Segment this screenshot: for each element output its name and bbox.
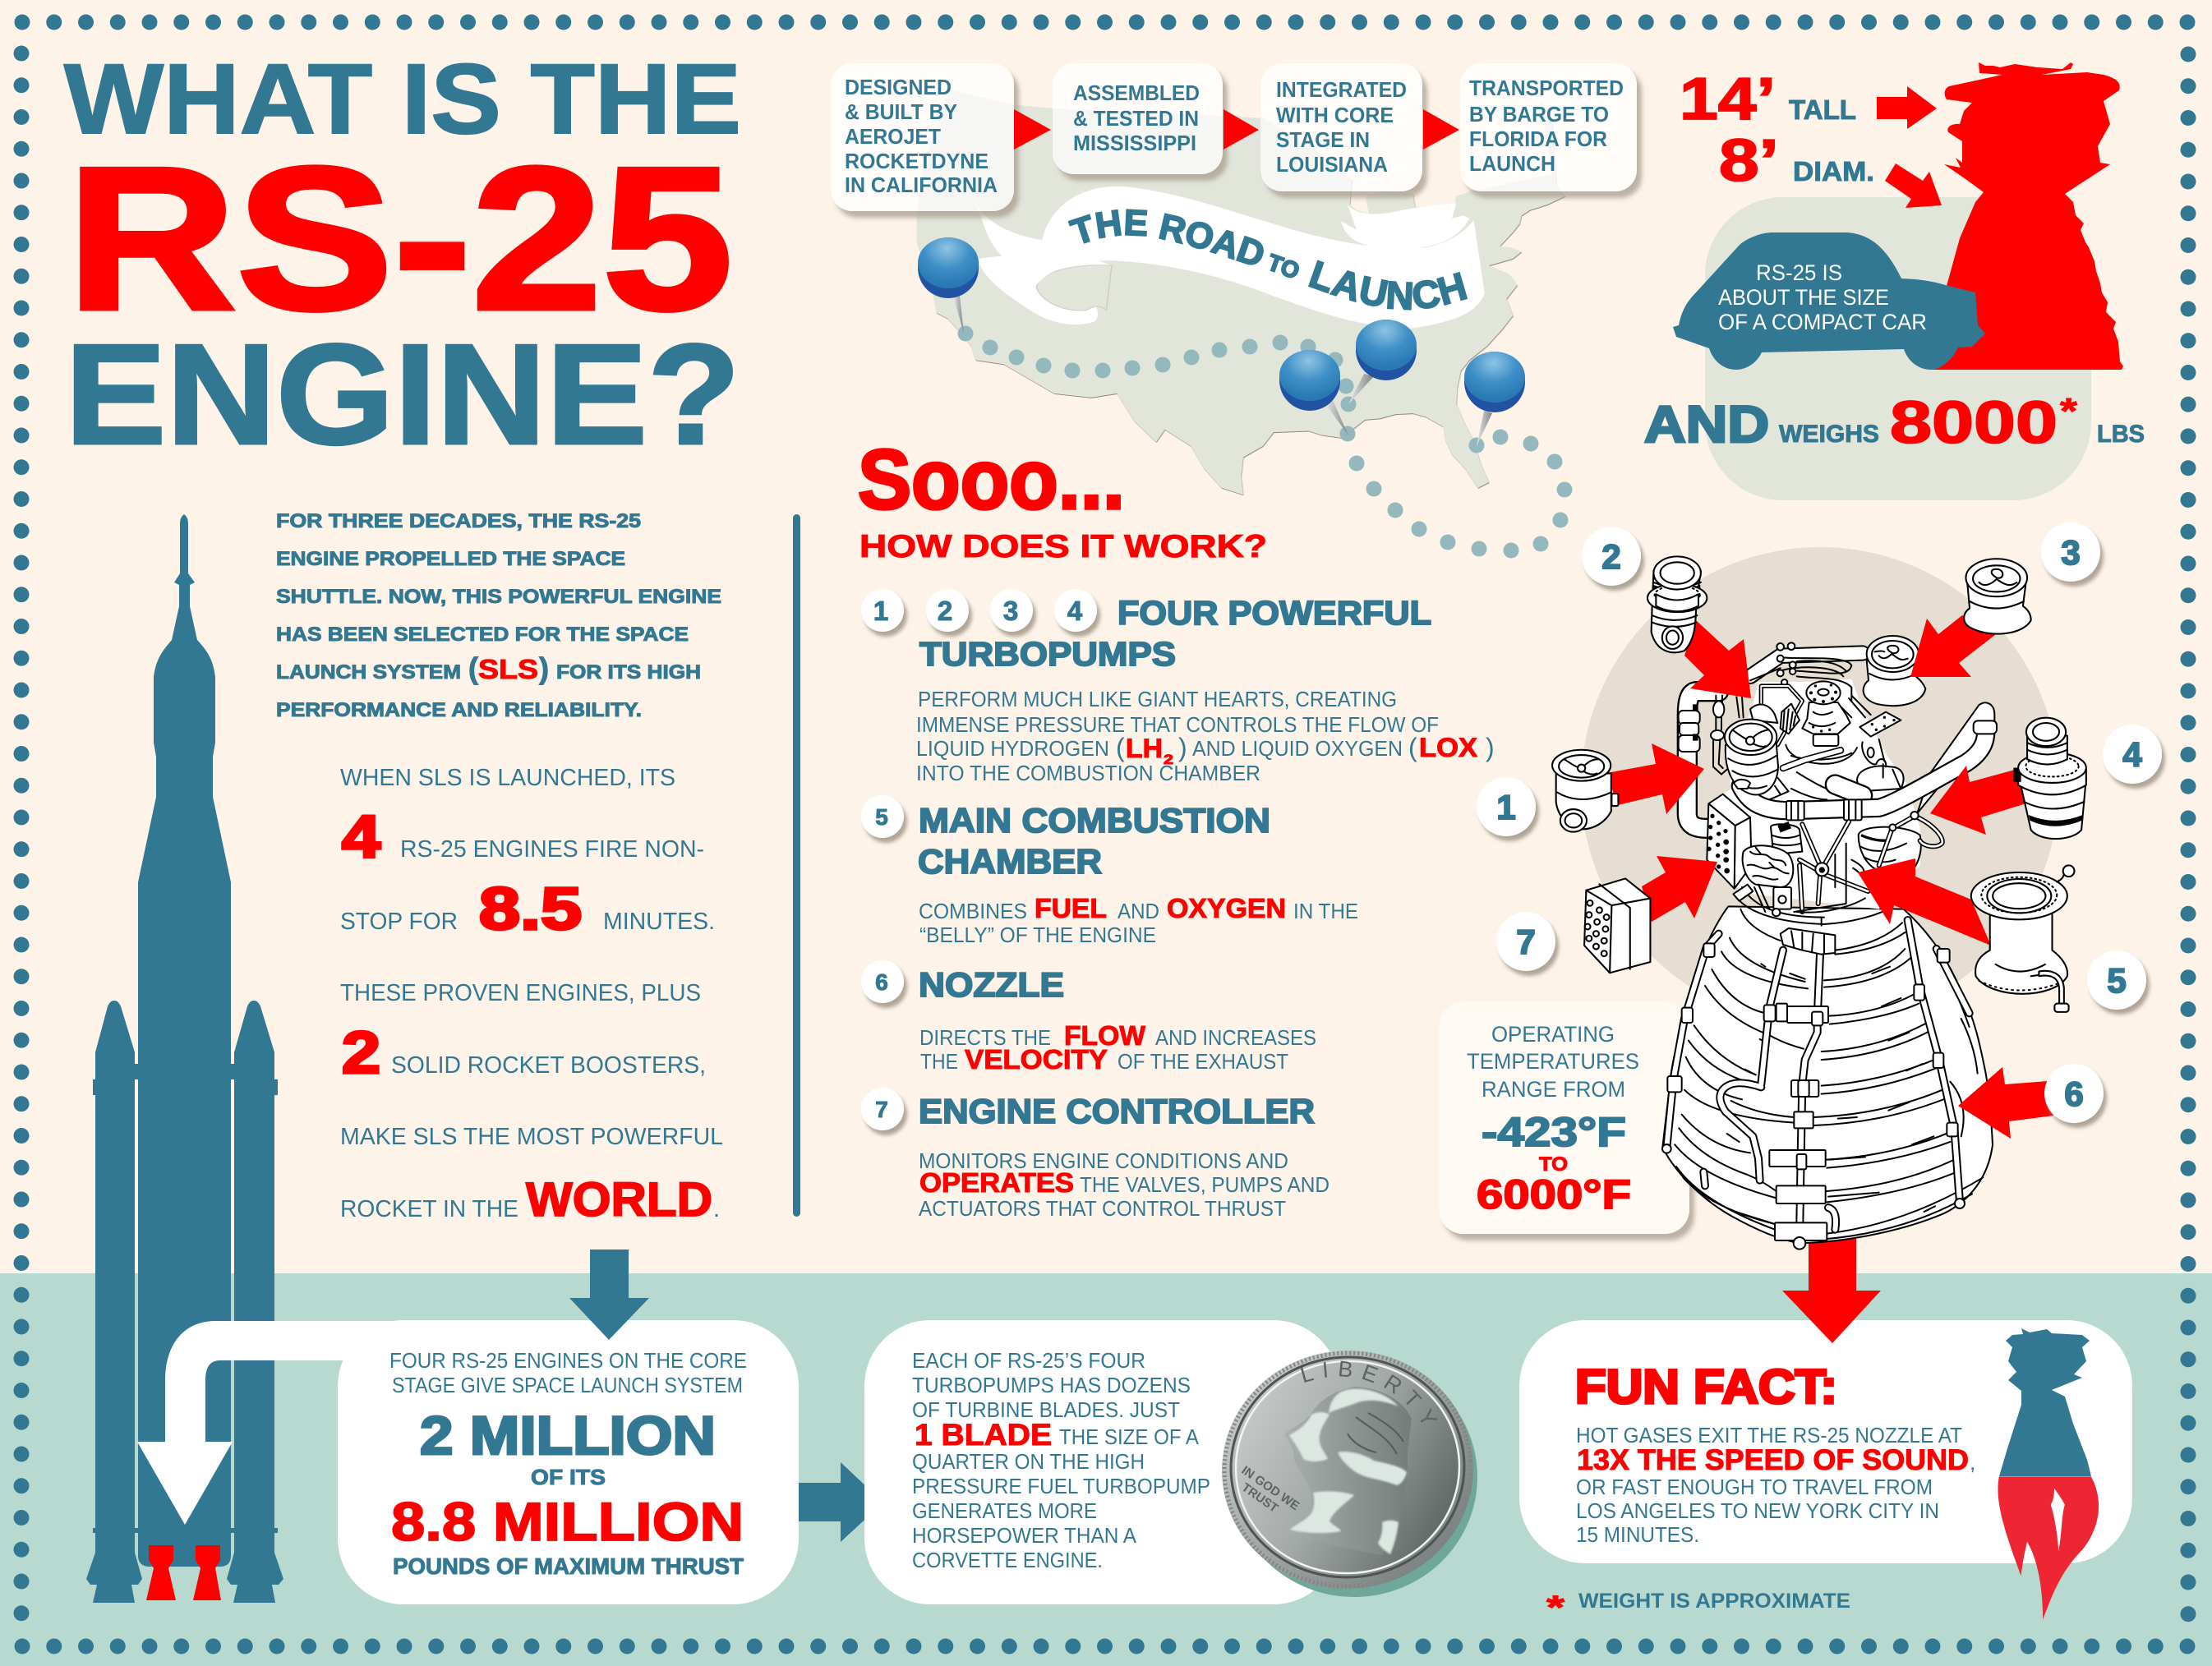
section: turbopumps: FOUR POWERFUL — [1118, 594, 1431, 632]
part number badges — [1477, 522, 2162, 1123]
operating temperatures callout — [1439, 1001, 1689, 1234]
ribbon top fold — [1341, 203, 1469, 249]
weight line: WEIGHS — [1779, 421, 1879, 448]
USA map shape — [917, 90, 1565, 495]
arrow step 1 — [1014, 109, 1051, 150]
ribbon loop opening — [1036, 265, 1112, 311]
section: nozzle: 6 — [875, 969, 888, 995]
title: WHAT IS THE — [64, 43, 741, 154]
red part arrows — [1606, 615, 2053, 1139]
section: engine controller: OPERATES — [919, 1167, 1074, 1198]
section: engine controller — [861, 1088, 1330, 1221]
panel: turbine blade: OF TURBINE BLADES. JUST — [912, 1397, 1180, 1422]
turbopump part 1 — [1552, 750, 1618, 832]
launch facts text block: STOP FOR — [340, 909, 458, 935]
panel: turbine blade: THE SIZE OF A — [1059, 1424, 1200, 1449]
launch facts text block: THESE PROVEN ENGINES, PLUS — [340, 980, 701, 1006]
title — [64, 43, 741, 474]
intro paragraph: SLS — [478, 654, 538, 684]
section: nozzle: FLOW — [1064, 1020, 1146, 1051]
section: main combustion chamber — [861, 795, 1358, 947]
rocket silhouette: SLS — [86, 514, 283, 1603]
coin inscriptions — [1303, 1377, 1434, 1454]
section: main combustion chamber: FUEL — [1035, 893, 1107, 923]
panel: turbine blade: 1 BLADE — [915, 1418, 1052, 1452]
title: ENGINE? — [65, 314, 740, 474]
panel: thrust: 8.8 MILLION — [391, 1491, 744, 1552]
operating temperatures callout: TO — [1539, 1153, 1568, 1176]
step box: integrated — [1260, 63, 1422, 191]
engine silhouette — [1933, 62, 2123, 370]
step box: transported: LAUNCH — [1469, 151, 1555, 176]
number badges 1 to 4: 4 — [1067, 596, 1083, 626]
panel: turbine blade: GENERATES MORE — [912, 1498, 1097, 1523]
white arrow to engines — [137, 1321, 394, 1525]
arrow step 3 — [1423, 109, 1459, 150]
teal arrow into thrust panel — [569, 1250, 649, 1340]
pale rounded backdrop — [1705, 197, 2091, 500]
operating temperatures callout: -423°F — [1482, 1109, 1626, 1155]
launch facts text block: MINUTES. — [603, 909, 715, 935]
step box: assembled: MISSISSIPPI — [1073, 131, 1196, 155]
intro paragraph: HAS BEEN SELECTED FOR THE SPACE — [276, 624, 689, 646]
number badges 1 to 4: 3 — [1003, 596, 1018, 626]
ribbon tail — [975, 203, 1112, 324]
intro paragraph: ENGINE PROPELLED THE SPACE — [276, 548, 625, 570]
launch facts text block: 4 — [342, 804, 380, 870]
section: turbopumps: LIQUID HYDROGEN — [916, 736, 1109, 761]
section: main combustion chamber: MAIN COMBUSTION — [919, 801, 1270, 840]
section: turbopumps: TURBOPUMPS — [919, 635, 1176, 673]
step box: assembled: & TESTED IN — [1073, 106, 1199, 131]
launch facts text block: ROCKET IN THE — [340, 1196, 518, 1222]
section: turbopumps: PERFORM MUCH LIKE GIANT HEARTS, CREATING — [918, 687, 1397, 711]
car caption: OF A COMPACT CAR — [1718, 310, 1927, 334]
panel: fun fact: HOT GASES EXIT THE RS-25 NOZZLE AT — [1576, 1423, 1962, 1447]
step box: integrated: INTEGRATED — [1276, 77, 1407, 102]
panel: turbine blade: QUARTER ON THE HIGH — [912, 1449, 1145, 1474]
step box: designed: ROCKETDYNE — [845, 149, 988, 173]
heading: Sooo how does it work: Sooo... — [858, 432, 1125, 527]
step box: assembled — [1053, 63, 1223, 174]
intro paragraph: FOR THREE DECADES, THE RS-25 — [276, 510, 641, 532]
launch facts text block: MAKE SLS THE MOST POWERFUL — [340, 1124, 723, 1150]
ribbon title: THE ROAD — [1068, 209, 1264, 265]
vertical divider — [793, 514, 800, 1217]
launch facts text block: SOLID ROCKET BOOSTERS, — [391, 1052, 706, 1079]
panel: turbine blade — [864, 1320, 1339, 1604]
section: engine controller: 7 — [875, 1097, 888, 1122]
diameter label: 8’ — [1719, 128, 1779, 194]
step box: assembled: ASSEMBLED — [1073, 81, 1200, 105]
compact car silhouette — [1673, 232, 1985, 370]
part number badges: 2 — [1601, 537, 1621, 576]
launch facts text block: 8.5 — [479, 877, 582, 942]
intro paragraph: ) — [539, 651, 549, 685]
arrow to engine top — [1877, 86, 1937, 129]
step box: integrated: STAGE IN — [1276, 127, 1370, 152]
arrow to engine body — [1885, 163, 1942, 208]
weight line: AND — [1644, 396, 1769, 453]
launch facts text block — [340, 765, 723, 1226]
weight line: LBS — [2097, 421, 2145, 448]
panel: turbine blade: EACH OF RS-25’S FOUR — [912, 1348, 1145, 1373]
panel: thrust: 2 MILLION — [420, 1405, 716, 1466]
number badges 1 to 4 — [861, 589, 1097, 632]
step box: designed: & BUILT BY — [845, 99, 957, 124]
section: turbopumps: ( — [1116, 733, 1125, 762]
step box: designed — [831, 63, 1014, 211]
teal arrow to turbine panel — [799, 1462, 883, 1542]
section: turbopumps: AND LIQUID OXYGEN — [1192, 736, 1403, 761]
part number badges: 4 — [2122, 735, 2142, 774]
heading: Sooo how does it work — [858, 432, 1267, 564]
section: engine controller: ENGINE CONTROLLER — [919, 1092, 1315, 1130]
section: nozzle: DIRECTS THE — [919, 1025, 1051, 1050]
section: turbopumps: ) — [1486, 733, 1495, 762]
red arrow shaft from nozzle — [1809, 1232, 1856, 1294]
weight line: * — [2060, 391, 2078, 431]
diameter label: DIAM. — [1793, 156, 1874, 186]
height label: 14’ — [1680, 67, 1776, 132]
ribbon main — [1035, 186, 1485, 328]
section: main combustion chamber: 5 — [875, 804, 888, 830]
combustion chamber part 5 — [1971, 865, 2074, 1012]
intro paragraph: ( — [468, 651, 478, 685]
panel: fun fact: 13X THE SPEED OF SOUND — [1577, 1444, 1969, 1476]
operating temperatures callout: TEMPERATURES — [1467, 1049, 1639, 1074]
diameter label — [1719, 128, 1874, 194]
step box: designed: IN CALIFORNIA — [845, 173, 998, 197]
panel: fun fact: LOS ANGELES TO NEW YORK CITY IN — [1576, 1498, 1939, 1523]
launch facts text block: WORLD — [526, 1173, 712, 1226]
step box: transported — [1460, 63, 1637, 191]
panel: engine size comparison — [1644, 62, 2145, 500]
step box: transported: FLORIDA FOR — [1469, 127, 1607, 151]
intro paragraph: FOR ITS HIGH — [556, 661, 701, 683]
section: turbopumps: INTO THE COMBUSTION CHAMBER — [916, 761, 1260, 785]
part number badges: 6 — [2064, 1075, 2084, 1113]
intro paragraph: SHUTTLE. NOW, THIS POWERFUL ENGINE — [276, 586, 721, 608]
intro paragraph: PERFORMANCE AND RELIABILITY. — [276, 699, 642, 721]
part number badges: 5 — [2107, 961, 2127, 1000]
arrow step 2 — [1224, 109, 1259, 150]
intro paragraph — [276, 510, 721, 721]
map pin: California — [918, 237, 979, 334]
red engines on rocket — [146, 1545, 221, 1600]
turbopump part 3 — [1964, 559, 2031, 634]
beige circle behind engine — [1581, 547, 2059, 1025]
footnote: weight is approximate: * — [1546, 1590, 1565, 1626]
weight line — [1644, 390, 2145, 456]
coin head — [1285, 1387, 1412, 1555]
section: main combustion chamber: “BELLY” OF THE ENGINE — [919, 923, 1156, 947]
section: turbopumps: LH — [1126, 734, 1163, 763]
car caption: ABOUT THE SIZE — [1718, 285, 1889, 310]
quarter coin: IN GOD WE — [1239, 1463, 1302, 1513]
dotted route — [958, 325, 1573, 559]
upper machinery — [1679, 642, 1997, 926]
panel: thrust: POUNDS OF MAXIMUM THRUST — [393, 1553, 744, 1579]
step box: designed: AEROJET — [845, 124, 941, 149]
section: turbopumps: ( — [1408, 733, 1417, 762]
section: turbopumps — [861, 589, 1495, 785]
launch facts text block: RS-25 ENGINES FIRE NON- — [400, 836, 704, 863]
quarter coin: TRUST — [1239, 1480, 1280, 1516]
heading: Sooo how does it work: HOW DOES IT WORK? — [859, 529, 1267, 564]
map pin: Louisiana — [1348, 320, 1417, 404]
controller part 7 — [1584, 878, 1650, 973]
quarter coin — [1222, 1351, 1477, 1597]
number badges 1 to 4: 1 — [873, 596, 888, 626]
step box: integrated: WITH CORE — [1276, 103, 1394, 127]
launch facts text block: . — [713, 1196, 720, 1222]
panel: thrust: STAGE GIVE SPACE LAUNCH SYSTEM — [392, 1373, 743, 1397]
intro paragraph: LAUNCH SYSTEM — [276, 661, 461, 683]
step box: transported: BY BARGE TO — [1469, 102, 1609, 127]
ribbon title: LAUNCH — [1308, 260, 1468, 311]
bottom teal-green band — [0, 1273, 2212, 1666]
part number badges: 1 — [1496, 788, 1516, 826]
turbopump part 4 — [2013, 718, 2086, 839]
footnote: weight is approximate — [1546, 1590, 1850, 1626]
section: main combustion chamber: IN THE — [1293, 899, 1358, 923]
panel: turbine blade: PRESSURE FUEL TURBOPUMP — [912, 1474, 1210, 1498]
map pin: Florida — [1464, 352, 1525, 446]
nozzle bell — [1662, 906, 1993, 1250]
section: turbopumps: LOX — [1419, 733, 1478, 762]
operating temperatures callout: 6000°F — [1477, 1171, 1631, 1217]
weight line: 8000 — [1890, 390, 2058, 456]
title: RS-25 — [67, 124, 733, 352]
section: turbopumps: IMMENSE PRESSURE THAT CONTROLS THE FLOW OF — [916, 712, 1439, 737]
panel: thrust — [338, 1320, 799, 1604]
turbopump part 2 — [1647, 556, 1707, 652]
launch facts text block: 2 — [342, 1020, 380, 1086]
map: road to launch — [917, 90, 1573, 559]
car caption — [1718, 260, 1927, 334]
step box: transported: TRANSPORTED — [1469, 76, 1624, 100]
red arrow head into fun fact — [1782, 1282, 1881, 1343]
section: main combustion chamber: CHAMBER — [918, 842, 1102, 881]
footnote: weight is approximate: WEIGHT IS APPROXIMATE — [1578, 1590, 1850, 1613]
number badges 1 to 4: 2 — [938, 596, 952, 626]
fun fact engine icon with flames — [1998, 1328, 2099, 1620]
launch facts text block: WHEN SLS IS LAUNCHED, ITS — [340, 765, 675, 791]
section: nozzle: OF THE EXHAUST — [1118, 1049, 1288, 1074]
height label: TALL — [1789, 94, 1856, 125]
panel: fun fact — [1519, 1320, 2132, 1563]
panel: fun fact: , — [1970, 1450, 1975, 1475]
section: main combustion chamber: AND — [1118, 899, 1159, 923]
section: nozzle: THE — [920, 1049, 958, 1074]
panel: fun fact: OR FAST ENOUGH TO TRAVEL FROM — [1576, 1475, 1933, 1499]
step box: designed: DESIGNED — [845, 75, 952, 99]
coin head highlights — [1289, 1389, 1407, 1554]
height label — [1680, 67, 1856, 132]
map pin: Mississippi — [1279, 350, 1348, 435]
turbopump on engine — [1864, 636, 1925, 706]
section: nozzle: VELOCITY — [965, 1044, 1108, 1075]
car caption: RS-25 IS — [1756, 260, 1842, 285]
section: nozzle: NOZZLE — [919, 965, 1064, 1004]
section: turbopumps: ) — [1178, 733, 1187, 762]
section: engine controller: THE VALVES, PUMPS AND — [1080, 1172, 1330, 1197]
operating temperatures callout: OPERATING — [1491, 1022, 1615, 1047]
section: main combustion chamber: COMBINES — [919, 899, 1027, 923]
engine line drawing — [1662, 636, 1997, 1250]
panel: turbine blade: HORSEPOWER THAN A — [912, 1523, 1137, 1548]
step box: integrated: LOUISIANA — [1276, 152, 1388, 177]
operating temperatures callout: RANGE FROM — [1482, 1077, 1625, 1102]
panel: fun fact: 15 MINUTES. — [1576, 1522, 1699, 1547]
ribbon title: TO — [1270, 253, 1299, 278]
panel: thrust: OF ITS — [531, 1465, 606, 1489]
section: nozzle: AND INCREASES — [1155, 1025, 1316, 1050]
panel: turbine blade: CORVETTE ENGINE. — [912, 1548, 1103, 1572]
section: turbopumps: 2 — [1164, 752, 1173, 767]
part number badges: 7 — [1516, 923, 1536, 961]
part number badges: 3 — [2061, 533, 2081, 572]
section: main combustion chamber: OXYGEN — [1167, 893, 1286, 923]
panel: turbine blade: TURBOPUMPS HAS DOZENS — [912, 1373, 1191, 1397]
quarter coin: LIBERTY — [1301, 1360, 1438, 1423]
section: engine controller: MONITORS ENGINE CONDITIONS AND — [919, 1148, 1288, 1173]
section: nozzle — [861, 960, 1316, 1075]
section: engine controller: ACTUATORS THAT CONTROL THRUST — [919, 1196, 1286, 1221]
panel: fun fact: FUN FACT: — [1575, 1360, 1837, 1414]
panel: thrust: FOUR RS-25 ENGINES ON THE CORE — [389, 1348, 747, 1373]
